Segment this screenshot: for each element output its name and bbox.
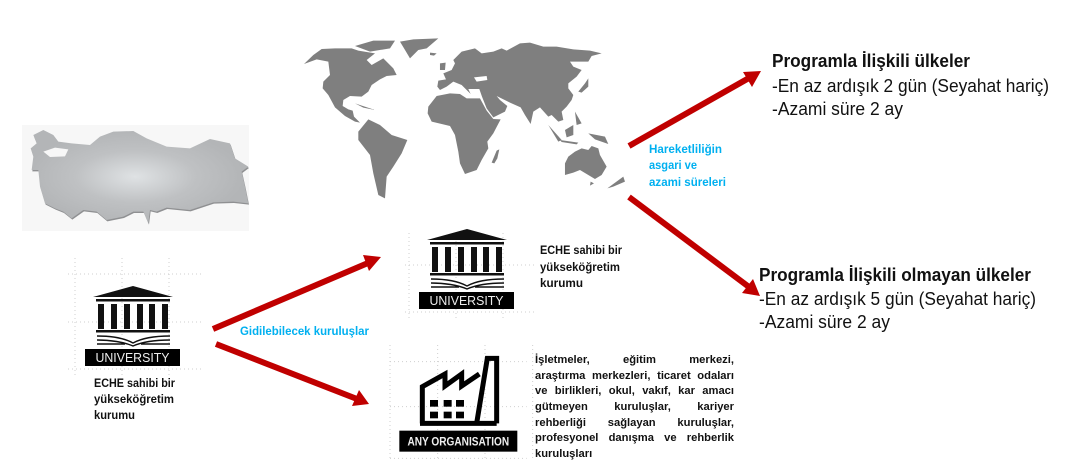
text: organisation types: gütmeyen kuruluşlar, kariyer xyxy=(535,401,734,413)
label: mobility durations: asgari ve xyxy=(649,160,697,172)
text: programme countries: -Azami süre 2 ay xyxy=(772,99,903,119)
icon: university host xyxy=(405,229,537,318)
text: left institution: yükseköğretim xyxy=(94,394,174,406)
text: organisation types: rehberliği sağlayan kuruluşlar, xyxy=(535,417,734,429)
text: non-programme countries xyxy=(759,265,1036,332)
text: organisation types xyxy=(535,354,734,460)
text: left institution: kurumu xyxy=(94,410,135,422)
icon: Turkey map xyxy=(22,125,249,231)
text: programme countries: -En az ardışık 2 gün (Seyahat hariç) xyxy=(772,76,1049,96)
icon: university left xyxy=(68,258,203,375)
text: programme countries: Programla İlişkili ülkeler xyxy=(772,51,970,71)
icon: any organisation factory xyxy=(390,345,533,460)
text: organisation types: ve birlikleri, okul, vakıf, kar amacı xyxy=(535,385,734,397)
text: non-programme countries: Programla İlişkili olmayan ülkeler xyxy=(759,265,1031,285)
label: mobility durations: azami süreleri xyxy=(649,177,726,189)
text: organisation types: kuruluşları xyxy=(535,448,592,460)
label: mobility durations xyxy=(649,144,726,189)
icon: university host: UNIVERSITY xyxy=(430,294,504,308)
text: programme countries xyxy=(772,51,1049,119)
icon: world map xyxy=(304,38,625,198)
icon: university left: UNIVERSITY xyxy=(96,351,170,365)
text: host institution: ECHE sahibi bir xyxy=(540,245,622,257)
text: non-programme countries: -En az ardışık 5 gün (Seyahat hariç) xyxy=(759,289,1036,309)
icon: any organisation factory: ANY ORGANISATION xyxy=(407,434,509,448)
arrow: to programme countries xyxy=(629,71,761,146)
text: organisation types: profesyonel danışma ve rehberlik xyxy=(535,432,734,444)
text: host institution xyxy=(540,245,622,290)
text: organisation types: araştırma merkezleri, ticaret odaları xyxy=(535,370,734,382)
label: destinations: Gidilebilecek kuruluşlar xyxy=(240,326,370,338)
text: organisation types: İşletmeler, eğitim merkezi, xyxy=(535,354,734,366)
arrow: to any organisation xyxy=(216,344,369,406)
arrow: to host university xyxy=(213,255,381,329)
text: left institution xyxy=(94,378,175,422)
text: host institution: yükseköğretim xyxy=(540,262,620,274)
text: left institution: ECHE sahibi bir xyxy=(94,378,175,390)
arrow: to non-programme countries xyxy=(629,197,760,296)
text: non-programme countries: -Azami süre 2 ay xyxy=(759,312,890,332)
label: mobility durations: Hareketliliğin xyxy=(649,144,722,156)
text: host institution: kurumu xyxy=(540,278,583,290)
